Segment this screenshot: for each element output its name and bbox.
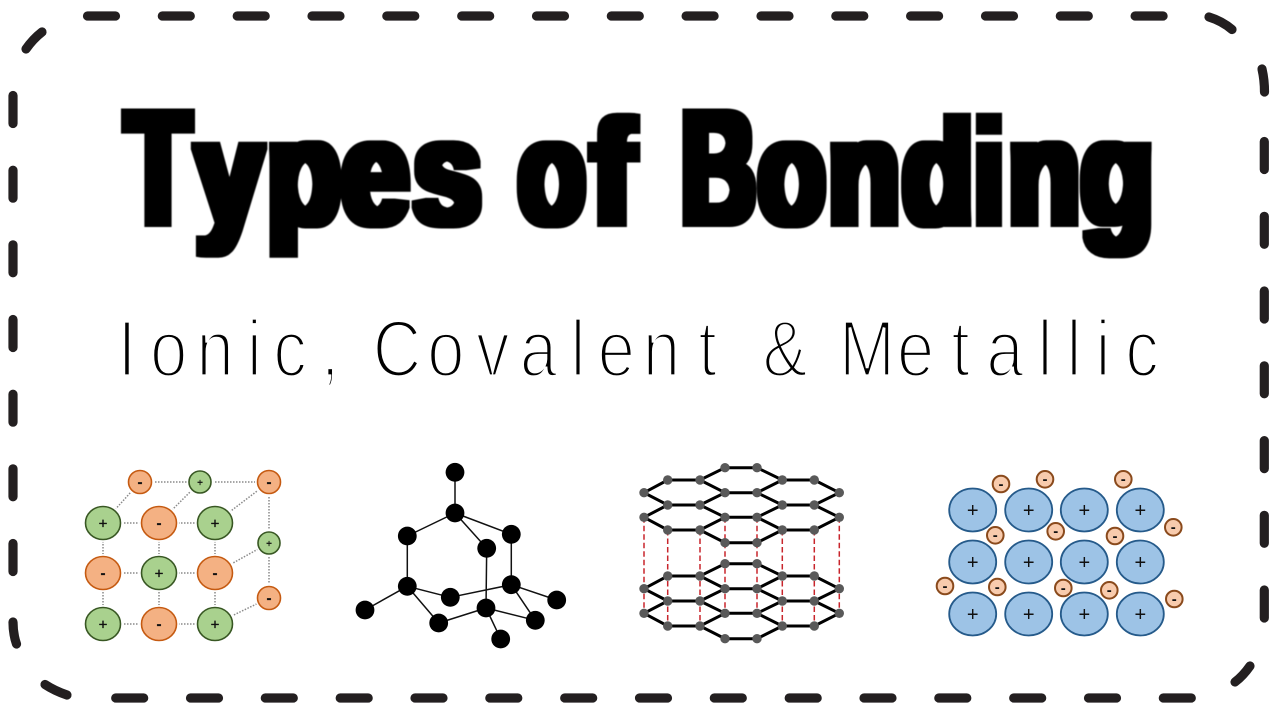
title: i (975, 90, 1003, 256)
title: s (413, 90, 481, 256)
diagram: ionic bonding lattice: + (155, 566, 164, 582)
diagram: metallic bonding: - (995, 579, 1000, 596)
diagram: ionic bonding lattice: - (212, 565, 218, 582)
diagram: metallic bonding: + (1023, 604, 1035, 626)
title: T (126, 76, 190, 258)
diagram: metallic bonding: - (1172, 591, 1177, 608)
diagram: metallic bonding: + (1023, 500, 1035, 522)
diagram: ionic bonding lattice: - (156, 515, 162, 532)
diagram: ionic bonding lattice: - (100, 565, 106, 582)
diagram: metallic bonding: - (942, 578, 948, 595)
title: B (682, 76, 755, 258)
diagram: covalent diamond structure (356, 463, 566, 648)
diagram: ionic bonding lattice (83, 468, 283, 643)
diagram: metallic bonding: + (1134, 604, 1146, 626)
title: e (342, 90, 409, 256)
diagram: ionic bonding lattice: + (266, 539, 272, 550)
diagram: metallic bonding: + (1134, 552, 1146, 574)
diagram: metallic bonding: + (967, 552, 979, 574)
diagram: ionic bonding lattice: + (99, 616, 108, 634)
diagram: metallic bonding: - (1107, 582, 1112, 599)
diagram: metallic bonding: - (1042, 471, 1048, 488)
diagram: metallic bonding: + (1023, 552, 1035, 574)
title: d (902, 90, 973, 256)
title: y (196, 90, 262, 256)
diagram: ionic bonding lattice: + (99, 516, 108, 532)
diagram: metallic bonding: + (1078, 604, 1090, 626)
title: n (1008, 90, 1080, 256)
diagram: metallic bonding: - (998, 476, 1004, 493)
diagram: metallic bonding: + (1134, 500, 1146, 522)
diagram: ionic bonding lattice: + (211, 516, 220, 532)
diagram: metallic bonding (937, 471, 1183, 636)
title: f (591, 90, 635, 256)
diagram: metallic bonding: - (1053, 523, 1058, 540)
title: n (828, 90, 900, 256)
title: g (1081, 90, 1154, 256)
diagram: metallic bonding: - (993, 527, 998, 544)
title: o (758, 90, 825, 256)
diagram: metallic bonding: + (967, 500, 979, 522)
diagram: ionic bonding lattice: + (211, 616, 220, 634)
title: o (518, 90, 585, 256)
diagram: metallic bonding: - (1121, 471, 1126, 488)
diagram: ionic bonding lattice: - (266, 474, 272, 491)
diagram: metallic bonding: + (967, 604, 979, 626)
title (126, 76, 1154, 258)
diagram: ionic bonding lattice: - (156, 616, 162, 633)
diagram: metallic bonding: - (1112, 528, 1118, 545)
diagram: ionic bonding lattice: - (138, 474, 142, 491)
diagram: metallic bonding: + (1078, 552, 1090, 574)
diagram: ionic bonding lattice: + (197, 478, 203, 489)
diagram: metallic bonding: + (1078, 500, 1090, 522)
diagram: ionic bonding lattice: - (266, 590, 272, 607)
diagram: metallic bonding: - (1171, 519, 1176, 536)
title: p (267, 90, 341, 256)
subtitle: Ionic, Covalent & Metallic (118, 304, 1159, 393)
diagram: metallic bonding: - (1061, 580, 1066, 597)
diagram: graphite layers (639, 463, 844, 643)
